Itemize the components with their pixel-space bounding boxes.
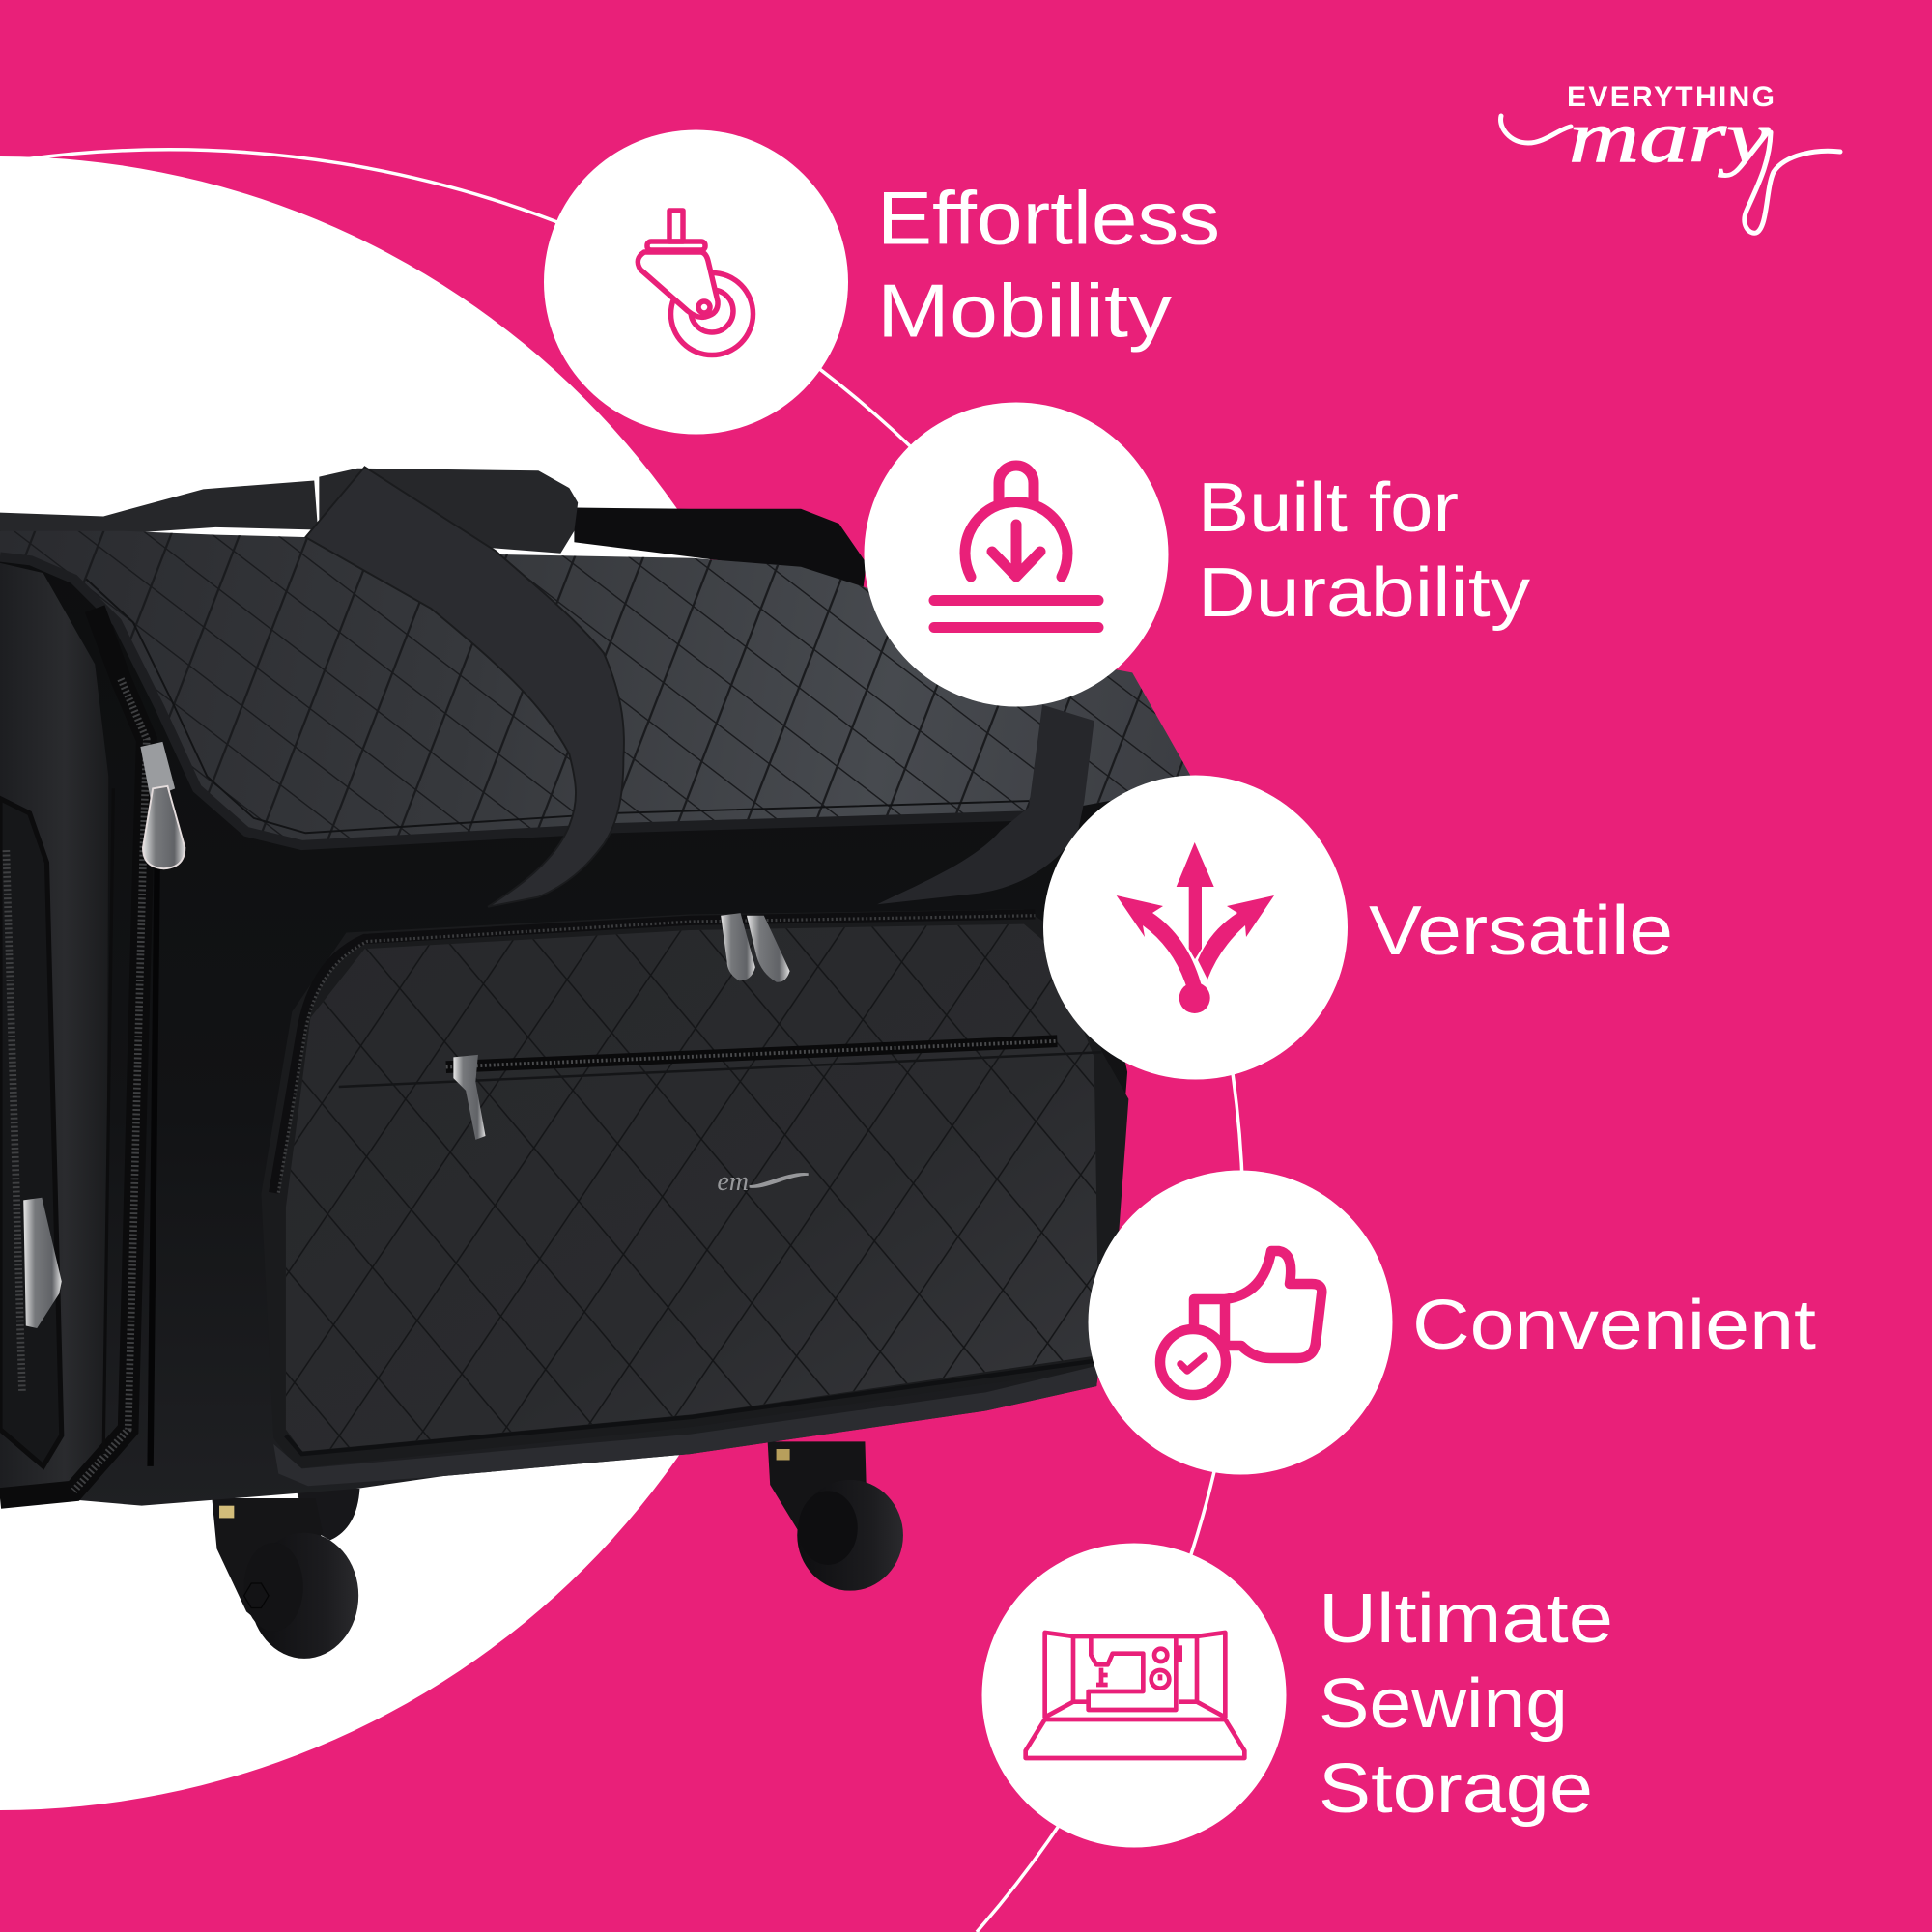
icon: weight on surface — [934, 466, 1098, 628]
icon: open bag with sewing machine — [1026, 1633, 1244, 1758]
label: Ultimate Sewing Storage: Sewing — [1319, 1665, 1568, 1743]
left strap — [0, 480, 318, 535]
label: Built for Durability: Built for — [1198, 469, 1459, 547]
zipper pull: pocket front — [453, 1055, 486, 1140]
label: Effortless Mobility: Mobility — [877, 269, 1172, 354]
brand logo: EVERYTHING — [1567, 81, 1775, 113]
left side panel — [0, 563, 108, 1493]
circle 4: convenient — [1088, 1171, 1393, 1474]
circle 2: built for durability — [864, 402, 1169, 707]
zipper pull: side — [140, 742, 185, 868]
wide shoulder band right — [877, 705, 1094, 904]
label: Ultimate Sewing Storage — [1319, 1580, 1613, 1828]
left small pocket — [0, 799, 62, 1466]
back wheel — [296, 1489, 359, 1540]
zipper pull: left — [23, 1198, 62, 1328]
brand logo — [1501, 81, 1840, 233]
label: Convenient: Convenient — [1412, 1287, 1816, 1364]
right caster — [768, 1441, 903, 1591]
label: Ultimate Sewing Storage: Storage — [1319, 1750, 1593, 1828]
circle 3: versatile — [1043, 775, 1348, 1080]
carry handle pad — [319, 469, 578, 554]
circle 1: effortless mobility — [544, 129, 848, 435]
bag logo mark — [717, 1167, 809, 1197]
side zipper — [0, 609, 157, 1498]
icon: caster wheel — [638, 211, 753, 355]
wide shoulder band left — [305, 467, 624, 907]
label: Effortless Mobility — [877, 176, 1220, 354]
zipper pulls: pocket top — [721, 913, 790, 982]
left caster — [212, 1498, 358, 1659]
white background circle — [0, 156, 827, 1810]
circle 5: ultimate sewing storage — [981, 1544, 1287, 1847]
bag logo mark: em — [717, 1167, 749, 1197]
label: Effortless Mobility: Effortless — [877, 176, 1220, 261]
icon: three-way arrows — [1117, 842, 1274, 1013]
pocket horizontal zipper — [339, 1041, 1101, 1087]
label: Built for Durability: Durability — [1198, 554, 1530, 632]
front pocket — [261, 909, 1128, 1468]
brand logo: mary — [1569, 97, 1770, 178]
quilted top flap — [0, 518, 1208, 863]
bottom edge band — [273, 1365, 1099, 1486]
label: Versatile: Versatile — [1369, 893, 1673, 970]
label: Built for Durability — [1198, 469, 1530, 632]
icon: thumbs up with check — [1160, 1251, 1321, 1395]
right handle strap — [574, 508, 867, 594]
product photo: quilted rolling bag — [0, 467, 1208, 1659]
thin connector arc — [24, 150, 1243, 1932]
main body — [0, 531, 1182, 1506]
label: Ultimate Sewing Storage: Ultimate — [1319, 1580, 1613, 1658]
